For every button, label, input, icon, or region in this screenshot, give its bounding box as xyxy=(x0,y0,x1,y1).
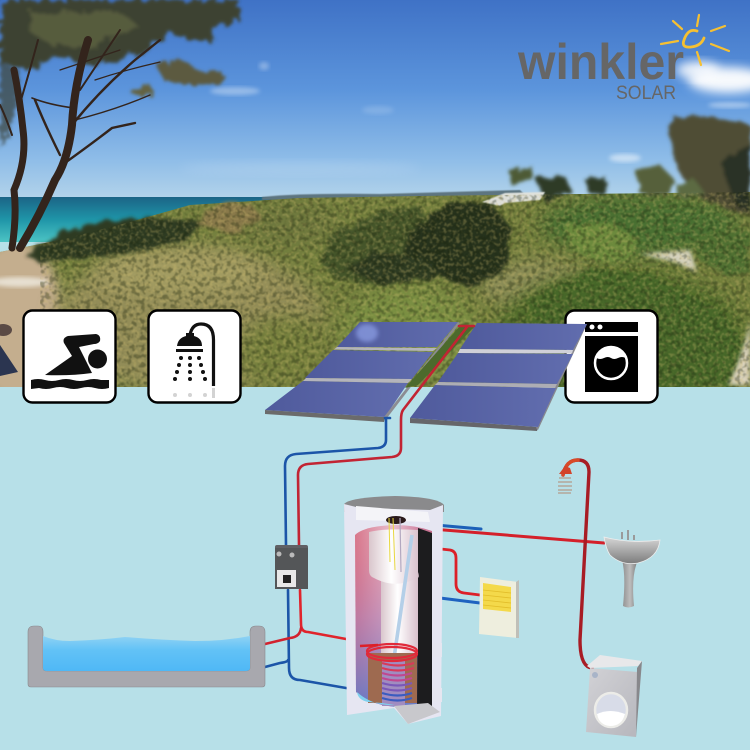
sink pedestal xyxy=(622,560,638,608)
shower head xyxy=(176,333,203,352)
hot water to fixtures xyxy=(407,527,604,543)
water drops xyxy=(173,356,215,398)
lower panel background xyxy=(0,387,750,750)
shower pipe xyxy=(190,324,214,386)
land base xyxy=(0,192,750,387)
washer knob xyxy=(592,672,598,678)
control dials xyxy=(276,552,294,558)
washer door xyxy=(595,693,627,727)
yellow grille xyxy=(483,583,511,612)
icon: swimmer xyxy=(24,310,116,402)
sink xyxy=(604,530,660,608)
gap foliage xyxy=(405,326,475,388)
logo subtitle: SOLAR xyxy=(616,82,676,104)
tank base xyxy=(394,703,440,724)
waves xyxy=(31,379,109,389)
anode and sensors xyxy=(389,518,395,570)
swimmer head xyxy=(88,350,107,368)
sink basin xyxy=(604,537,660,564)
copper heat exchanger xyxy=(368,653,417,703)
pool basin xyxy=(28,626,265,687)
left frame strips xyxy=(303,322,460,418)
sand left xyxy=(0,277,50,287)
vegetation colour areas xyxy=(0,195,745,400)
icon: washing machine xyxy=(566,310,658,402)
solar flow red xyxy=(298,326,474,545)
washer body xyxy=(585,336,638,392)
washer door xyxy=(595,347,627,379)
washing machine xyxy=(586,655,642,737)
icon: shower xyxy=(148,310,240,402)
photo background: coast scene xyxy=(0,0,750,400)
washer buttons xyxy=(590,324,602,330)
logo sun xyxy=(661,15,729,65)
tank interior xyxy=(355,525,432,707)
door water line xyxy=(596,347,626,359)
left collectors xyxy=(265,322,458,417)
swimmer figure xyxy=(45,334,100,375)
tank lid xyxy=(344,496,444,512)
tank dark wall xyxy=(417,528,432,710)
tank top fitting xyxy=(386,516,406,524)
right shadow xyxy=(410,418,538,431)
white buildings xyxy=(482,192,545,206)
hot water column xyxy=(381,560,418,655)
shrubs xyxy=(25,203,750,387)
sky xyxy=(0,0,750,200)
tank blue stub xyxy=(413,523,481,529)
control display xyxy=(277,570,296,587)
sand path right xyxy=(640,250,697,272)
tree trunks and branches xyxy=(0,30,160,248)
distant headland xyxy=(262,190,530,200)
left panel shadows xyxy=(265,410,385,422)
far trees right xyxy=(510,116,750,215)
shower head xyxy=(558,466,572,494)
sea xyxy=(0,197,300,242)
controller blue xyxy=(432,597,480,603)
shower and washer riser xyxy=(563,460,592,668)
red lines under control unit xyxy=(300,590,346,639)
pool water xyxy=(43,636,250,671)
solar collector array xyxy=(265,322,587,431)
logo wordmark: winkler xyxy=(517,34,684,90)
controller red xyxy=(432,548,480,595)
foliage texture xyxy=(40,190,750,390)
right side ports xyxy=(432,586,442,702)
shower spray xyxy=(558,477,572,494)
blue lines under control unit xyxy=(288,590,346,688)
solar controller box xyxy=(479,577,519,638)
sink taps xyxy=(622,530,634,540)
blue dip tube xyxy=(394,535,412,658)
right collectors xyxy=(410,323,587,427)
storage tank xyxy=(344,496,444,724)
tree foliage xyxy=(0,0,240,150)
piping xyxy=(265,326,604,688)
heating coil xyxy=(367,644,417,700)
tank outer insulation xyxy=(344,504,443,724)
swimming pool xyxy=(28,626,265,687)
logo xyxy=(517,15,729,104)
control unit xyxy=(275,545,308,589)
solar return blue xyxy=(285,418,390,545)
cold water base xyxy=(357,692,395,705)
right frame strips xyxy=(435,349,573,388)
washer control strip xyxy=(585,322,638,332)
clouds xyxy=(180,61,750,174)
